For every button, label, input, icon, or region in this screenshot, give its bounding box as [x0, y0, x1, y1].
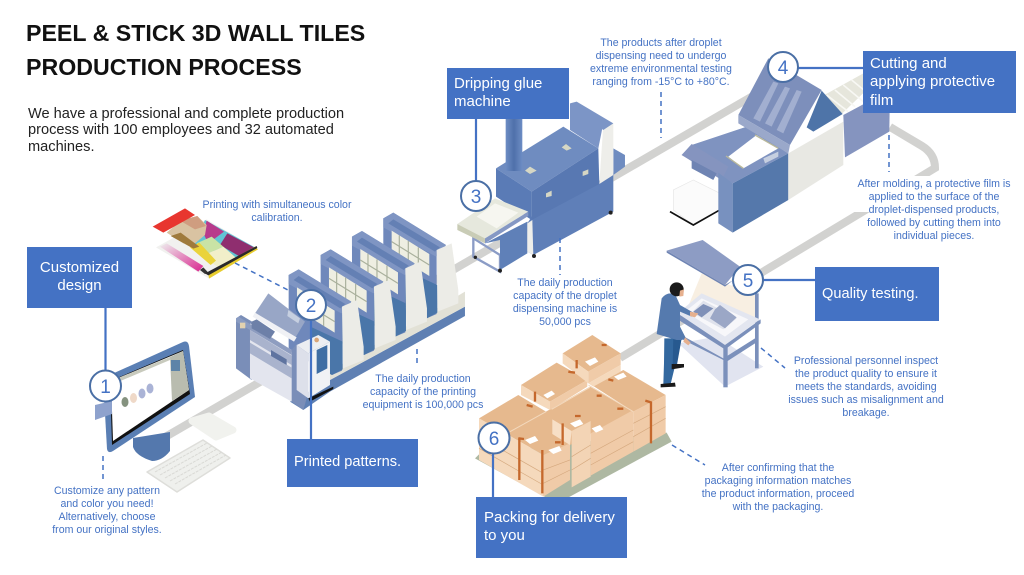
note: environmental testing: ranging from -15°C to +80°C.	[592, 76, 730, 88]
note: inspection: issues such as misalignment and	[788, 394, 944, 406]
step marker 5	[733, 265, 763, 295]
note: packaging	[702, 462, 854, 513]
icon: dripping glue machine	[457, 102, 625, 273]
label: packing for delivery: Packing for delivery	[484, 509, 615, 526]
note: environmental testing: extreme environmental testing	[590, 63, 732, 75]
note: printing capacity: equipment is 100,000 pcs	[363, 399, 483, 411]
note: inspection: meets the standards, avoiding	[795, 381, 937, 393]
note: environmental testing: dispensing need to undergo	[596, 50, 726, 62]
step marker 2	[296, 290, 326, 320]
icon: computer	[95, 342, 233, 492]
label: customized design: Customized	[40, 259, 119, 276]
note: dispensing capacity	[513, 277, 617, 328]
label: cutting and applying film: film	[870, 92, 893, 109]
step marker 6: 6	[489, 429, 499, 450]
title: PRODUCTION PROCESS	[26, 54, 302, 80]
icon: cutting machine	[670, 58, 890, 233]
intro text	[28, 106, 344, 155]
label: dripping glue machine: Dripping glue	[454, 75, 542, 92]
note: dispensing capacity: 50,000 pcs	[539, 316, 591, 328]
note: customize	[52, 485, 162, 536]
note: protective film	[857, 178, 1011, 242]
step marker 1	[90, 370, 121, 402]
step marker 3: 3	[471, 187, 481, 208]
note: inspection	[788, 355, 944, 419]
icon: printing press	[236, 213, 465, 410]
conveyor belts	[160, 86, 935, 440]
step marker 5: 5	[743, 271, 753, 292]
label: dripping glue machine	[447, 68, 569, 119]
note: customize: from our original styles.	[52, 524, 162, 536]
note: packaging: packaging information matches	[705, 475, 851, 487]
icon: packed boxes on pallet	[475, 335, 672, 503]
note: inspection: Professional personnel inspect	[794, 355, 938, 367]
note: dispensing capacity: capacity of the droplet	[513, 290, 617, 302]
note: protective film: followed by cutting them into	[867, 217, 1001, 229]
note: protective film: applied to the surface of the	[869, 191, 999, 203]
note: protective film: droplet-dispensed products,	[869, 204, 999, 216]
note: colour calibration: Printing with simultaneous color	[203, 199, 351, 211]
icon: quality testing desk and inspector	[657, 240, 763, 387]
label: printed patterns	[287, 439, 418, 487]
note: dispensing capacity: dispensing machine is	[513, 303, 617, 315]
label: packing for delivery	[476, 497, 627, 558]
icon: colour chart	[153, 208, 258, 279]
label: packing for delivery: to you	[484, 527, 525, 544]
note: customize: and color you need!	[60, 498, 154, 510]
note: environmental testing	[590, 37, 732, 88]
note: customize: Alternatively, choose	[59, 511, 155, 523]
note: inspection: breakage.	[842, 407, 890, 419]
step marker 3	[461, 181, 491, 211]
note: protective film: individual pieces.	[894, 230, 974, 242]
note: printing capacity: capacity of the printing	[370, 386, 476, 398]
title	[26, 20, 365, 80]
intro text: process with 100 employees and 32 automated	[28, 122, 334, 138]
step marker 4: 4	[778, 58, 789, 79]
label: customized design: design	[57, 277, 102, 294]
step marker 6	[478, 422, 510, 454]
connector lines and dashed leaders	[103, 68, 889, 497]
note: colour calibration: calibration.	[251, 212, 303, 224]
step marker 1: 1	[100, 377, 111, 398]
note: packaging: with the packaging.	[733, 501, 823, 513]
label: printed patterns: Printed patterns.	[294, 454, 401, 470]
step marker 2: 2	[306, 296, 316, 317]
intro text: We have a professional and complete production	[28, 106, 344, 122]
note: colour calibration	[203, 199, 352, 224]
label: cutting and applying film	[863, 51, 1016, 113]
label: dripping glue machine: machine	[454, 93, 511, 110]
step marker 4	[768, 52, 798, 82]
label: cutting and applying film: Cutting and	[870, 55, 947, 72]
intro text: machines.	[28, 139, 95, 155]
note: inspection: the product quality to ensure it	[795, 368, 937, 380]
label: quality testing: Quality testing.	[822, 286, 919, 302]
note: protective film: After molding, a protective film is	[857, 178, 1011, 190]
label: cutting and applying film: applying protective	[870, 73, 995, 90]
label: customized design	[27, 247, 132, 308]
title: PEEL & STICK 3D WALL TILES	[26, 20, 365, 46]
label: quality testing	[815, 267, 939, 321]
note: environmental testing: The products after droplet	[600, 37, 722, 49]
note: packaging: the product information, proceed	[702, 488, 854, 500]
note: packaging: After confirming that the	[722, 462, 834, 474]
note: dispensing capacity: The daily production	[517, 277, 613, 289]
note: printing capacity	[363, 373, 483, 411]
note: customize: Customize any pattern	[54, 485, 160, 497]
note: printing capacity: The daily production	[375, 373, 471, 385]
